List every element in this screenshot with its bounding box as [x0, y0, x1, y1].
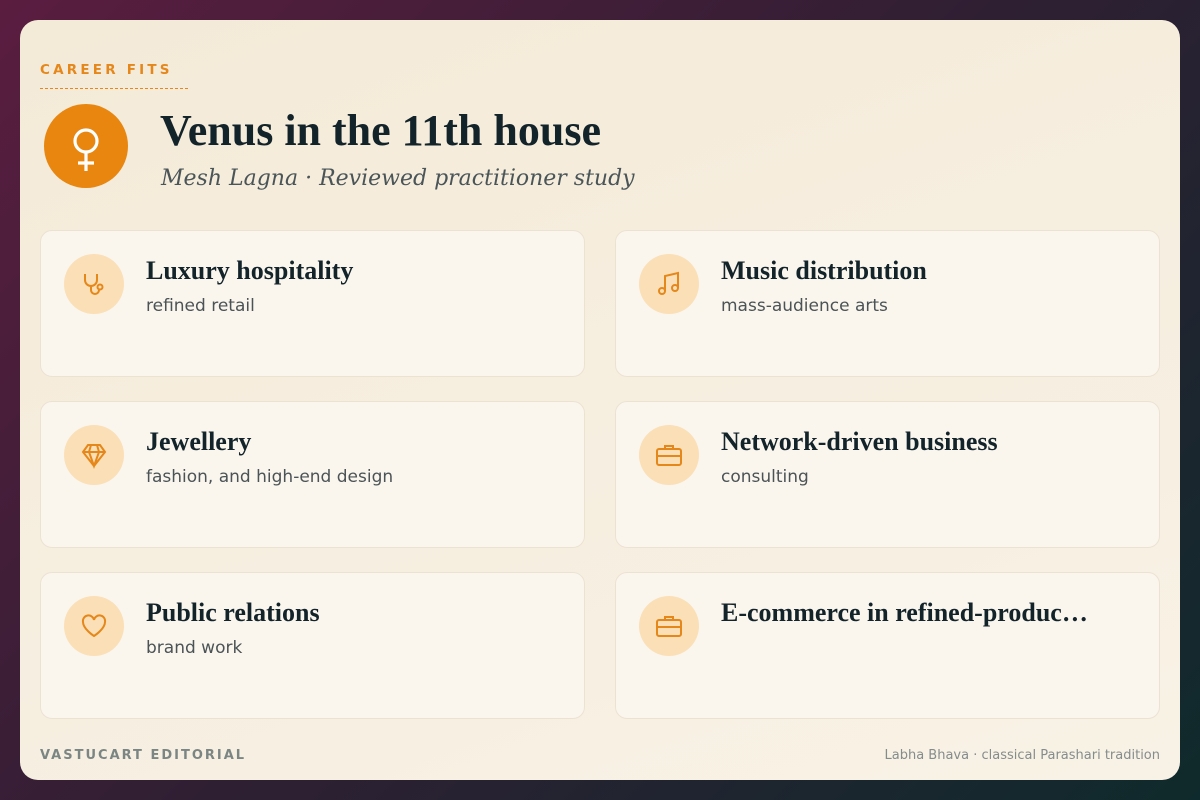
kicker: CAREER FITS	[40, 62, 173, 78]
panel: jewellery	[40, 401, 585, 548]
panel: luxury hospitality: refined retail	[146, 296, 255, 316]
footer left: VASTUCART EDITORIAL	[40, 748, 246, 763]
panel: music distribution	[615, 230, 1160, 377]
icon: venus	[44, 104, 128, 188]
panel: jewellery: Jewellery	[146, 427, 251, 456]
panel: public relations: brand work	[146, 638, 242, 658]
panel: network-driven business: consulting	[721, 467, 809, 487]
panel: music distribution: mass-audience arts	[721, 296, 888, 316]
panel: luxury hospitality: Luxury hospitality	[146, 256, 353, 285]
panel: e-commerce	[615, 572, 1160, 719]
panel: e-commerce: E-commerce in refined-produc…	[721, 598, 1088, 627]
panel: luxury hospitality	[40, 230, 585, 377]
panel: public relations: Public relations	[146, 598, 320, 627]
panel: jewellery: fashion, and high-end design	[146, 467, 393, 487]
subtitle: Mesh Lagna · Reviewed practitioner study	[161, 166, 635, 191]
panel: network-driven business	[615, 401, 1160, 548]
footer right: Labha Bhava · classical Parashari tradition	[884, 748, 1160, 763]
panel: network-driven business: Network-driven business	[721, 427, 998, 456]
title: Venus in the 11th house	[160, 106, 601, 155]
panel: public relations	[40, 572, 585, 719]
panel: music distribution: Music distribution	[721, 256, 927, 285]
